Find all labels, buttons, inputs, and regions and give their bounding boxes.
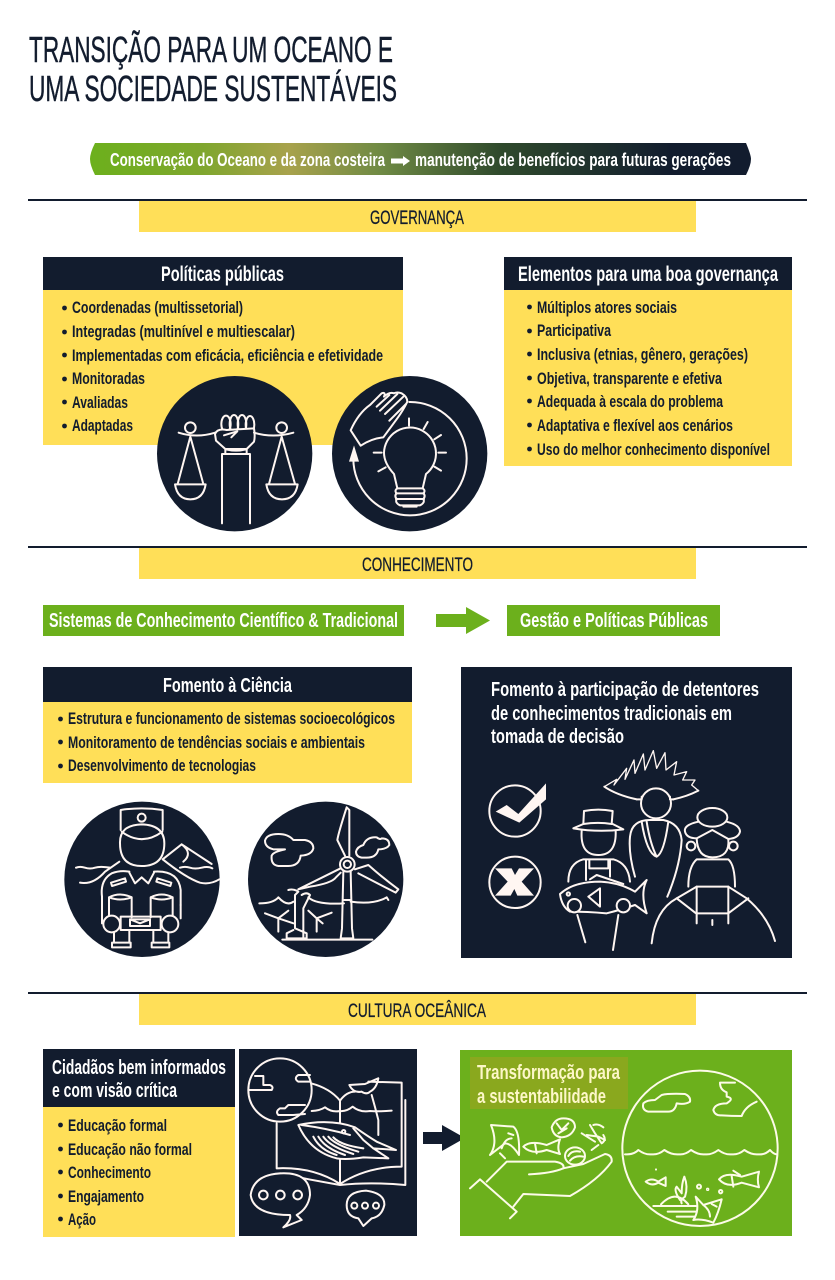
list: elementos de governança: Múltiplos atores sociais	[537, 299, 677, 317]
list: fomento à ciência: Desenvolvimento de tecnologias	[68, 757, 256, 775]
icon: ocean in circle	[622, 1071, 778, 1226]
list: cidadãos	[58, 1117, 192, 1229]
list: elementos de governança: Adequada à escala do problema	[537, 393, 724, 411]
panel: cidadãos bem informados	[43, 1049, 235, 1237]
heading: Governança	[139, 201, 696, 232]
panel: elementos para uma boa governança	[504, 257, 792, 466]
heading: Conhecimento: CONHECIMENTO	[362, 555, 473, 576]
list: cidadãos: Educação não formal	[68, 1141, 192, 1159]
panel: transformação para a sustentabilidade: a sustentabilidade	[477, 1086, 606, 1108]
banner: conservation to benefits: manutenção de benefícios para futuras gerações	[415, 150, 731, 170]
heading: Cultura Oceânica: CULTURA OCEÂNICA	[348, 1000, 486, 1022]
icon: wind turbines	[248, 802, 403, 957]
list: políticas públicas: Coordenadas (multissetorial)	[72, 299, 243, 317]
banner: conservation to benefits: Conservação do Oceano e da zona costeira	[110, 150, 386, 170]
list: políticas públicas: Implementadas com eficácia, eficiência e efetividade	[72, 347, 383, 365]
panel: políticas públicas	[43, 257, 403, 445]
heading: Conhecimento	[139, 548, 696, 579]
title	[29, 29, 397, 109]
panel: fomento à participação	[461, 667, 792, 958]
panel: transformação para a sustentabilidade: Transformação para	[477, 1062, 621, 1084]
title: UMA SOCIEDADE SUSTENTÁVEIS	[29, 68, 397, 109]
list: políticas públicas: Adaptadas	[72, 417, 133, 435]
list: políticas públicas: Integradas (multinível e multiescalar)	[72, 323, 295, 341]
list: políticas públicas: Avaliadas	[72, 394, 128, 412]
panel: políticas públicas: Políticas públicas	[161, 263, 284, 286]
arrow: green	[436, 607, 490, 634]
heading: Governança: GOVERNANÇA	[370, 208, 464, 229]
icon: researcher with binoculars	[64, 802, 220, 957]
title: TRANSIÇÃO PARA UM OCEANO E	[29, 29, 393, 70]
list: cidadãos: Engajamento	[68, 1188, 144, 1206]
banner: conservation to benefits	[90, 143, 751, 175]
list: fomento à ciência: Estrutura e funcionamento de sistemas socioecológicos	[68, 710, 395, 728]
label: sistemas de conhecimento	[43, 605, 404, 636]
list: elementos de governança: Objetiva, transparente e efetiva	[537, 370, 723, 388]
panel: cidadãos bem informados: e com visão crítica	[52, 1080, 178, 1102]
list: elementos de governança	[527, 299, 770, 459]
label: gestão e políticas públicas: Gestão e Políticas Públicas	[520, 610, 708, 632]
list: elementos de governança: Inclusiva (etnias, gênero, gerações)	[537, 346, 748, 364]
list: fomento à ciência: Monitoramento de tendências sociais e ambientais	[68, 734, 365, 752]
heading: Cultura Oceânica	[139, 994, 696, 1025]
panel: fomento à participação: de conhecimentos tradicionais em	[491, 703, 732, 725]
panel: cidadãos bem informados: Cidadãos bem informados	[52, 1057, 226, 1079]
panel: fomento à ciência: Fomento à Ciência	[163, 675, 293, 697]
list: elementos de governança: Adaptativa e flexível aos cenários	[537, 417, 733, 435]
label: sistemas de conhecimento: Sistemas de Conhecimento Científico & Tradicional	[49, 610, 398, 632]
icon: check and cross	[489, 783, 546, 908]
icon: fist holding scales	[157, 376, 312, 531]
list: políticas públicas: Monitoradas	[72, 370, 145, 388]
icon: hand and light bulb cycle	[332, 376, 487, 531]
panel: transformação para a sustentabilidade	[460, 1050, 792, 1236]
label: gestão e políticas públicas	[507, 605, 720, 636]
list: cidadãos: Ação	[68, 1211, 96, 1229]
icon: traditional community people	[560, 751, 775, 950]
icon: hand holding marine life	[470, 1118, 612, 1218]
list: cidadãos: Educação formal	[68, 1117, 167, 1135]
panel: book with whale	[239, 1049, 417, 1236]
panel: fomento à ciência	[43, 667, 412, 783]
list: fomento à ciência	[58, 710, 395, 775]
list: elementos de governança: Participativa	[537, 322, 612, 340]
list: políticas públicas	[62, 299, 383, 435]
list: cidadãos: Conhecimento	[68, 1164, 151, 1182]
arrow: dark	[423, 1125, 465, 1151]
panel: fomento à participação: tomada de decisão	[491, 726, 624, 748]
